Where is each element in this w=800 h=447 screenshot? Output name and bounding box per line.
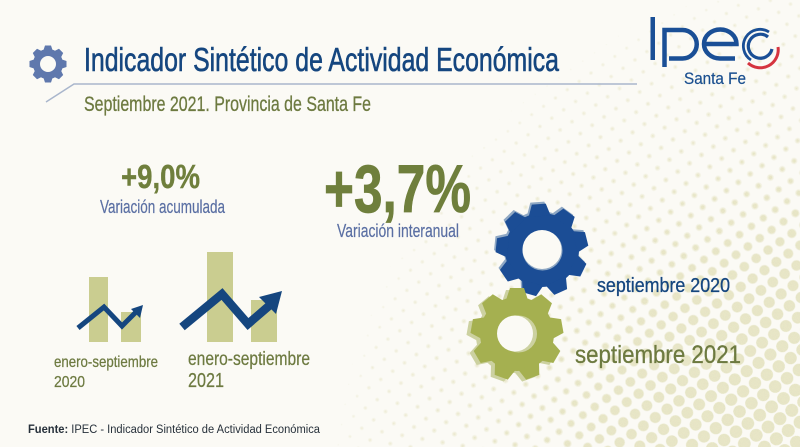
label 2021: enero-septiembre bbox=[188, 349, 310, 370]
bars 2020 bbox=[89, 277, 141, 342]
trend arrow 2020 bbox=[78, 305, 143, 328]
label 2020: 2020 bbox=[54, 374, 85, 391]
chart: enero-septiembre 2021 bbox=[182, 252, 310, 392]
label: septiembre 2021: septiembre 2021 bbox=[575, 341, 741, 369]
label: septiembre 2020: septiembre 2020 bbox=[597, 275, 730, 297]
label: Variación interanual: Variación interanual bbox=[337, 221, 459, 241]
label 2020: enero-septiembre bbox=[54, 354, 158, 371]
source note: Fuente: IPEC - Indicador Sintético de Actividad Económica bbox=[28, 424, 321, 436]
logo: Santa Fe text: Santa Fe bbox=[684, 70, 746, 88]
bars 2021 bbox=[207, 252, 277, 342]
icon: green gear bbox=[466, 288, 564, 383]
icon: header gear bbox=[30, 46, 66, 82]
subtitle: Septiembre 2021. Provincia de Santa Fe bbox=[84, 93, 371, 116]
label: Variación acumulada: Variación acumulada bbox=[100, 197, 226, 217]
header divider line bbox=[46, 84, 637, 102]
chart: enero-septiembre 2020 bbox=[54, 277, 158, 391]
logo: IPEC Santa Fe bbox=[650, 17, 778, 88]
title: Indicador Sintético de Actividad Económica bbox=[84, 41, 559, 78]
stat: year-on-year variation bbox=[324, 151, 471, 241]
stat: cumulative variation bbox=[100, 158, 226, 217]
value +3,7%: +3,7% bbox=[324, 151, 471, 227]
halftone dot pattern bbox=[338, 0, 800, 447]
trend arrow 2021 bbox=[182, 291, 282, 327]
label 2021: 2021 bbox=[188, 370, 224, 392]
icon: blue gear bbox=[494, 201, 589, 297]
value +9,0%: +9,0% bbox=[121, 158, 200, 195]
